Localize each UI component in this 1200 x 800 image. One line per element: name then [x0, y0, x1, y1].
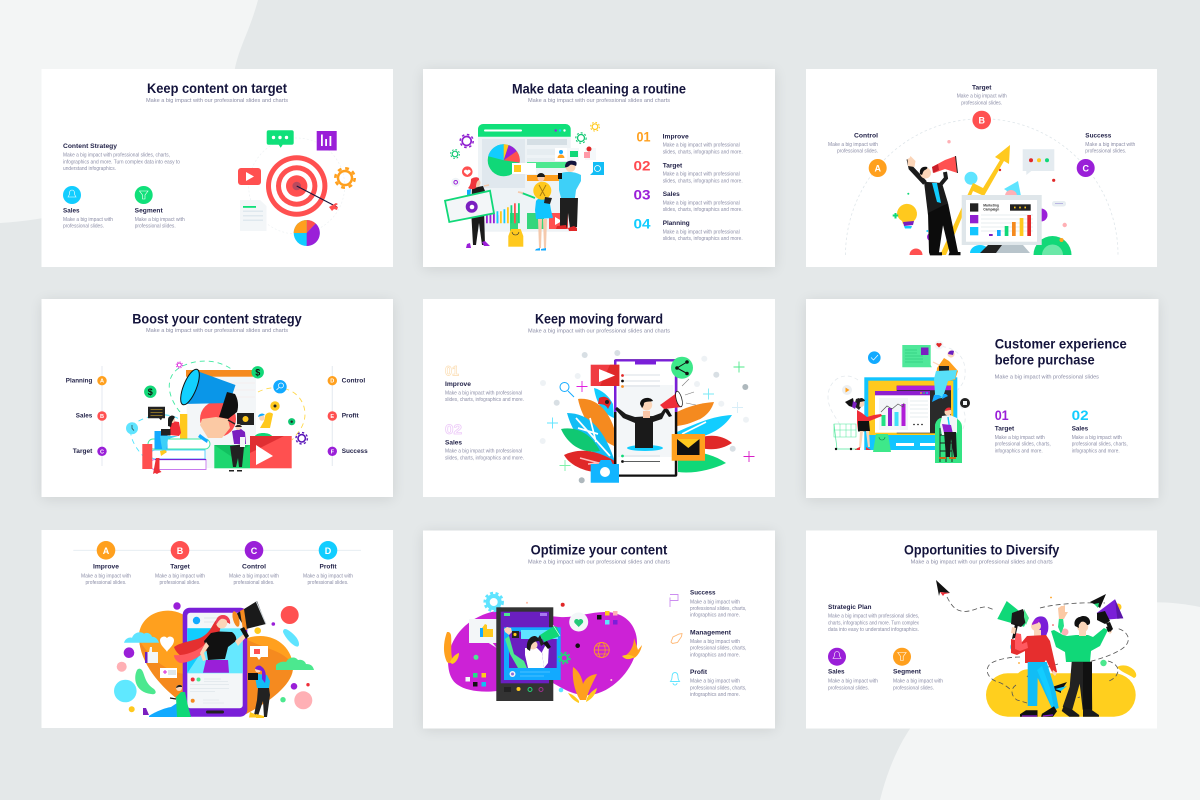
- text block: segment: Make a big impact with: [893, 679, 943, 685]
- step A improve: Make a big impact with: [81, 573, 131, 579]
- text block: 01 improve: [445, 363, 524, 403]
- text block: 02 sales: professional slides, charts,: [1072, 442, 1128, 448]
- text block: segment: Segment: [893, 669, 922, 676]
- badge: C: C: [1082, 164, 1089, 174]
- right list: control profit success: D: [330, 379, 334, 385]
- badge: B: B: [978, 116, 985, 126]
- text block: target: professional slides.: [961, 100, 1002, 106]
- list item: management: professional slides, charts,: [690, 646, 746, 652]
- text block: strategic plan: charts, infographics and more. Turn complex: [828, 620, 919, 626]
- step A improve: A: [103, 546, 110, 556]
- text block: 01 target: Make a big impact with: [995, 435, 1045, 441]
- title: [995, 335, 1127, 368]
- panel: optimize your content: [423, 530, 775, 728]
- list item: 01 improve: Make a big impact with professional: [663, 143, 740, 149]
- title: Keep content on target: [147, 80, 287, 96]
- text block: control: Make a big impact with: [828, 142, 878, 148]
- list item: profit: Profit: [690, 669, 708, 676]
- step B target: [155, 541, 205, 586]
- list item: 01 improve: 01: [636, 129, 651, 145]
- background blob: bottom right: [880, 602, 1200, 800]
- text block: 02 sales: Sales: [445, 439, 462, 446]
- step D profit: professional slides.: [308, 580, 348, 586]
- text block: sales: [63, 208, 113, 230]
- list item: profit: [670, 669, 746, 698]
- badge: B: [972, 111, 991, 129]
- list item: 02 target: Target: [663, 162, 683, 169]
- illustration: phone on magenta blob: [444, 593, 642, 703]
- step C control: [229, 541, 279, 586]
- badge: A: [869, 159, 887, 177]
- background blob: top left: [0, 0, 258, 223]
- text block: target: [957, 84, 1007, 106]
- text block: strategic plan: [828, 604, 919, 633]
- list item: management: infographics and more.: [690, 652, 740, 658]
- subtitle: Make a big impact with our professional slides and charts: [528, 328, 670, 334]
- text block: sales: Make a big impact with: [828, 679, 878, 685]
- illustration: megaphone, books and video: [126, 361, 307, 474]
- text block: sales: professional slides.: [63, 224, 104, 230]
- left list: planning sales target: Target: [73, 448, 93, 455]
- subtitle: Make a big impact with our professional slides and charts: [528, 559, 670, 565]
- title: Opportunities to Diversify: [904, 541, 1060, 557]
- title: Boost your content strategy: [132, 310, 302, 326]
- text block: 02 sales: Sales: [1072, 426, 1089, 433]
- list item: success: professional slides, charts,: [690, 606, 746, 612]
- list item: 04 planning: Planning: [663, 220, 690, 227]
- text block: strategic plan: Strategic Plan: [828, 604, 872, 611]
- text block: 01 improve: Improve: [445, 381, 471, 388]
- text block: 02 sales: Make a big impact with: [1072, 435, 1122, 441]
- timeline line: [73, 549, 361, 551]
- list item: 04 planning: 04: [634, 215, 651, 231]
- illustration: megaphone, books and video: $: [148, 387, 153, 397]
- list item: 01 improve: slides, charts, infographics and more.: [663, 149, 743, 155]
- list item: success: Make a big impact with: [690, 599, 740, 605]
- icon: segment funnel: [893, 648, 911, 666]
- list item: 02 target: 02: [634, 158, 651, 174]
- subtitle: Make a big impact with professional slides: [995, 375, 1099, 381]
- text block: target: Make a big impact with: [957, 94, 1007, 100]
- list item: profit: Make a big impact with: [690, 679, 740, 685]
- icon: segment funnel: [135, 186, 153, 204]
- list item: success: Success: [690, 589, 716, 596]
- title: Keep moving forward: [535, 311, 663, 327]
- text block: 02 sales: [1072, 407, 1128, 454]
- title: Optimize your content: [531, 541, 668, 557]
- text block: strategic plan: data into easy to understand infographics.: [828, 627, 919, 633]
- list item: 03 sales: Make a big impact with professional: [663, 200, 740, 206]
- step A improve: professional slides.: [86, 580, 126, 586]
- list item: 03 sales: slides, charts, infographics and more.: [663, 207, 743, 213]
- step C control: professional slides.: [234, 580, 274, 586]
- text block: sales: professional slides.: [828, 685, 869, 691]
- icon: sales bell: [828, 648, 846, 666]
- right list: control profit success: F: [331, 449, 335, 455]
- text block: content strategy: understand infographics.: [63, 166, 116, 172]
- text block: 02 sales: [445, 421, 524, 461]
- list item: 04 planning: Make a big impact with professional: [663, 229, 740, 235]
- text block: content strategy: infographics and more. Turn complex data into easy to: [63, 159, 180, 165]
- text block: sales: [828, 669, 878, 691]
- subtitle: Make a big impact with our professional slides and charts: [528, 98, 670, 104]
- list item: management: Management: [690, 629, 732, 636]
- left list: planning sales target: B: [100, 414, 104, 420]
- title: Customer experience: [995, 335, 1127, 351]
- illustration: marketer with megaphone and monitor: [893, 140, 1072, 255]
- illustration: phone with heart and presenter: [114, 601, 314, 718]
- text block: segment: professional slides.: [893, 685, 934, 691]
- step D profit: [303, 541, 353, 586]
- text block: 01 target: infographics and more.: [995, 448, 1043, 454]
- right list: control profit success: E: [330, 414, 334, 420]
- text block: content strategy: Content Strategy: [63, 143, 117, 150]
- text block: 01 target: 01: [995, 407, 1009, 423]
- right list: control profit success: [328, 366, 368, 466]
- text block: sales: Make a big impact with: [63, 217, 113, 223]
- text block: control: [828, 132, 878, 154]
- text block: strategic plan: Make a big impact with professional slides,: [828, 614, 919, 620]
- step C control: Make a big impact with: [229, 573, 279, 579]
- illustration: marketer with megaphone and monitor: Marketing: [983, 204, 999, 208]
- text block: 01 improve: Make a big impact with professional: [445, 390, 522, 396]
- panel: keep moving forward: [423, 299, 775, 497]
- panel: opportunities to diversify: [806, 530, 1157, 728]
- illustration: monitor with shoppers: [828, 340, 970, 463]
- list item: profit: infographics and more.: [690, 692, 740, 698]
- list item: success: [670, 589, 746, 619]
- text block: success: Success: [1085, 132, 1112, 139]
- list item: success: infographics and more.: [690, 613, 740, 619]
- step B target: Make a big impact with: [155, 573, 205, 579]
- text block: 01 improve: slides, charts, infographics and more.: [445, 397, 524, 403]
- text block: content strategy: [63, 143, 180, 172]
- illustration: two people with megaphones and paper planes: [936, 580, 1136, 717]
- step A improve: Improve: [93, 564, 119, 571]
- text block: control: Control: [854, 132, 878, 139]
- list item: 02 target: [634, 158, 743, 184]
- list item: management: Make a big impact with: [690, 639, 740, 645]
- illustration: browser dashboard with people: [445, 122, 604, 251]
- text block: sales: Sales: [828, 669, 845, 676]
- illustration: phone, leaves and presenter: [540, 350, 754, 483]
- text block: success: Make a big impact with: [1085, 142, 1136, 148]
- list item: 03 sales: [634, 186, 743, 213]
- text block: 01 improve: 01: [445, 363, 459, 379]
- list item: 03 sales: 03: [634, 186, 651, 202]
- text block: segment: [893, 669, 943, 691]
- text block: 02 sales: 02: [1072, 407, 1089, 423]
- text block: segment: professional slides.: [135, 224, 176, 230]
- text block: 02 sales: infographics and more.: [1072, 448, 1120, 454]
- list item: 01 improve: [636, 129, 743, 155]
- panel: target control success arc: [806, 69, 1157, 267]
- list item: 04 planning: slides, charts, infographics and more.: [663, 236, 743, 242]
- subtitle: Make a big impact with our professional slides and charts: [146, 328, 288, 334]
- text block: 01 target: professional slides, charts,: [995, 442, 1051, 448]
- step B target: professional slides.: [160, 580, 200, 586]
- badge: C: [1077, 159, 1095, 177]
- left list: planning sales target: C: [100, 449, 104, 455]
- right list: control profit success: Profit: [342, 413, 359, 420]
- step C control: C: [251, 546, 258, 556]
- panel: customer experience before purchase: [806, 299, 1158, 498]
- text block: 02 sales: Make a big impact with professional: [445, 449, 522, 455]
- text block: content strategy: Make a big impact with professional slides, charts,: [63, 153, 170, 159]
- panel: boost your content strategy: [42, 299, 393, 497]
- list item: 01 improve: Improve: [663, 133, 689, 140]
- left list: planning sales target: A: [100, 379, 104, 385]
- step B target: Target: [170, 564, 191, 571]
- left list: planning sales target: [66, 366, 107, 466]
- subtitle: Make a big impact with our professional slides and charts: [911, 559, 1053, 565]
- icon: sales bell: [63, 186, 81, 204]
- text block: success: [1085, 132, 1136, 154]
- list item: 04 planning: [634, 215, 743, 242]
- panel: keep content on target: [42, 69, 393, 267]
- subtitle: Make a big impact with our professional slides and charts: [146, 98, 288, 104]
- list item: 02 target: Make a big impact with professional: [663, 172, 740, 178]
- text block: 02 sales: 02: [445, 421, 462, 437]
- list item: management: [671, 629, 746, 658]
- list item: 03 sales: Sales: [663, 191, 680, 198]
- illustration: target with icons: [238, 130, 355, 246]
- text block: control: professional slides.: [837, 148, 878, 154]
- illustration: marketer with megaphone and monitor: Campaign: [983, 208, 999, 212]
- step D profit: D: [325, 546, 332, 556]
- step D profit: Profit: [320, 564, 337, 571]
- text block: success: professional slides.: [1085, 148, 1126, 154]
- step C control: Control: [242, 564, 266, 571]
- card shadows: [42, 71, 1158, 730]
- dashed arc: [846, 119, 1118, 255]
- text block: segment: Segment: [135, 208, 163, 215]
- text block: segment: Make a big impact with: [135, 217, 185, 223]
- panel: make data cleaning a routine: [423, 69, 775, 267]
- left list: planning sales target: Planning: [66, 378, 92, 385]
- title: Make data cleaning a routine: [512, 80, 686, 96]
- text block: 02 sales: slides, charts, infographics and more.: [445, 455, 524, 461]
- panel: improve target control profit timeline: [42, 530, 393, 728]
- text block: 01 target: [995, 407, 1051, 454]
- text block: 01 target: Target: [995, 426, 1015, 433]
- right list: control profit success: Success: [342, 448, 368, 455]
- badge: A: A: [874, 164, 881, 174]
- text block: target: Target: [972, 84, 992, 91]
- step B target: B: [177, 546, 184, 556]
- step A improve: [81, 541, 131, 586]
- text block: segment: [135, 208, 185, 230]
- text block: sales: Sales: [63, 208, 80, 215]
- illustration: megaphone, books and video: $: [255, 367, 260, 377]
- step D profit: Make a big impact with: [303, 573, 353, 579]
- title: before purchase: [995, 352, 1095, 368]
- left list: planning sales target: Sales: [76, 413, 93, 420]
- right list: control profit success: Control: [342, 378, 365, 385]
- list item: profit: professional slides, charts,: [690, 685, 746, 691]
- list item: 02 target: slides, charts, infographics and more.: [663, 178, 743, 184]
